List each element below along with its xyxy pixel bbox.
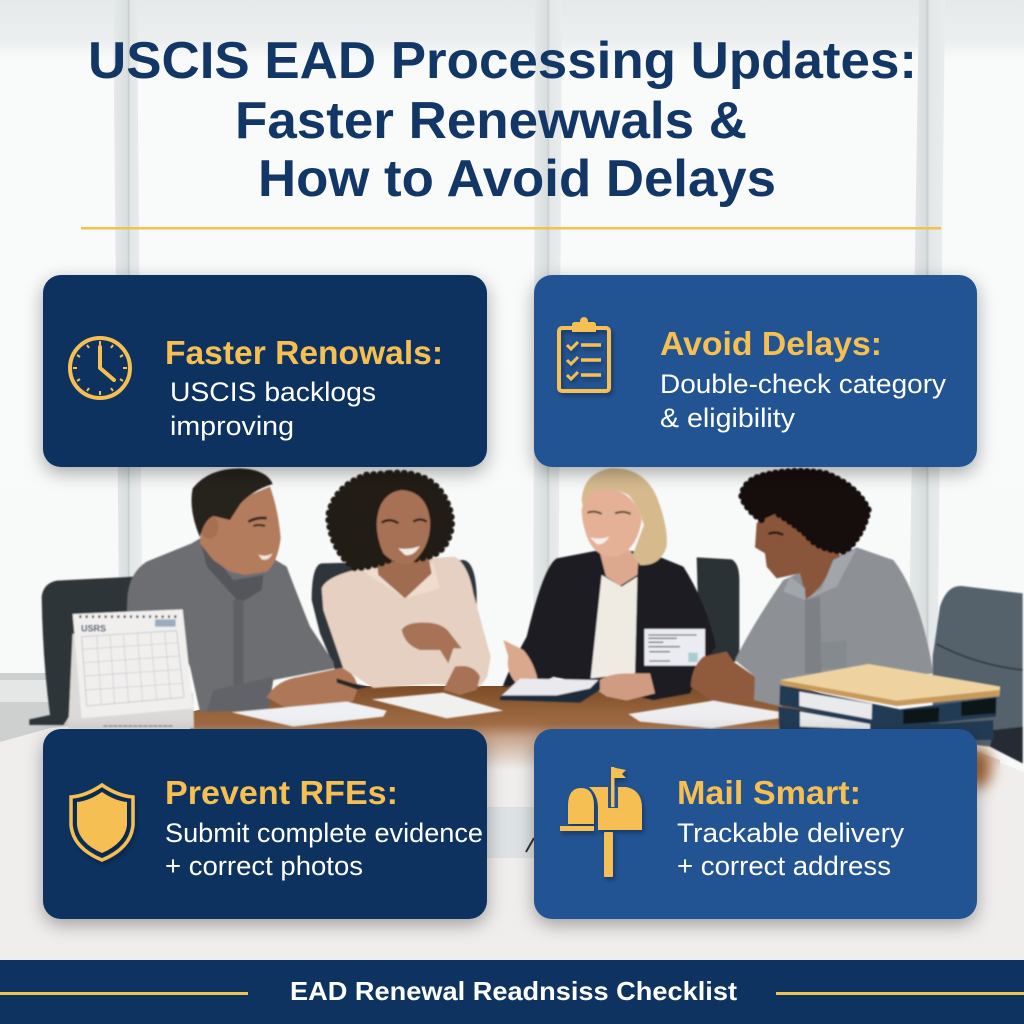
papers in table reflection [487, 807, 537, 858]
panel: faster renewals: USCIS backlogs [170, 377, 376, 407]
panel: faster renewals: Faster Renowals: [165, 334, 443, 371]
calendar: USRS [81, 624, 106, 634]
chair right [933, 586, 1023, 763]
panel: mail smart: Mail Smart: [677, 774, 861, 811]
young man [691, 471, 933, 707]
panel: faster renewals: improving [170, 411, 294, 441]
panel: avoid delays: & eligibility [660, 403, 796, 433]
icon: mailbox [560, 767, 642, 877]
calendar [68, 609, 194, 728]
people photo left [29, 468, 503, 728]
binders and folder [778, 664, 1000, 740]
panel: prevent RFEs: Prevent RFEs: [165, 774, 398, 811]
icon: clipboard checklist [559, 317, 609, 391]
title [88, 32, 917, 208]
title: Faster Renewwals & [235, 92, 747, 150]
panel: mail smart: + correct address [677, 851, 891, 881]
footer banner: EAD Renewal Readnsiss Checklist [290, 976, 737, 1006]
id card [644, 629, 705, 666]
footer banner [0, 960, 1024, 1024]
man in grey shirt [127, 468, 368, 712]
title: USCIS EAD Processing Updates: [88, 32, 917, 90]
blonde woman [503, 468, 716, 701]
panel: prevent RFEs: + correct photos [165, 851, 363, 881]
woman in blouse [322, 473, 491, 695]
chair: left [29, 577, 133, 725]
chair: second [312, 560, 477, 673]
panel: avoid delays: Double-check category [660, 369, 947, 399]
table [0, 686, 1024, 960]
clipboard papers [500, 678, 600, 703]
icon: clock [70, 338, 130, 398]
panel: faster renewals [43, 275, 487, 467]
title: How to Avoid Delays [258, 150, 776, 208]
wood tabletop [190, 686, 1000, 788]
icon: shield [71, 785, 133, 860]
chair behind blonde woman [697, 557, 739, 673]
people photo right [500, 468, 1023, 763]
papers under man's hand [232, 702, 387, 727]
paper stack on table [628, 701, 778, 728]
panel: mail smart: Trackable delivery [677, 818, 905, 848]
panel: avoid delays: Avoid Delays: [660, 325, 882, 362]
panel: prevent RFEs: Submit complete evidence [165, 818, 483, 848]
panel: avoid delays [534, 275, 977, 467]
paper under woman's hand [372, 693, 503, 718]
panel: mail smart [534, 729, 977, 919]
panel: prevent RFEs [43, 729, 487, 919]
